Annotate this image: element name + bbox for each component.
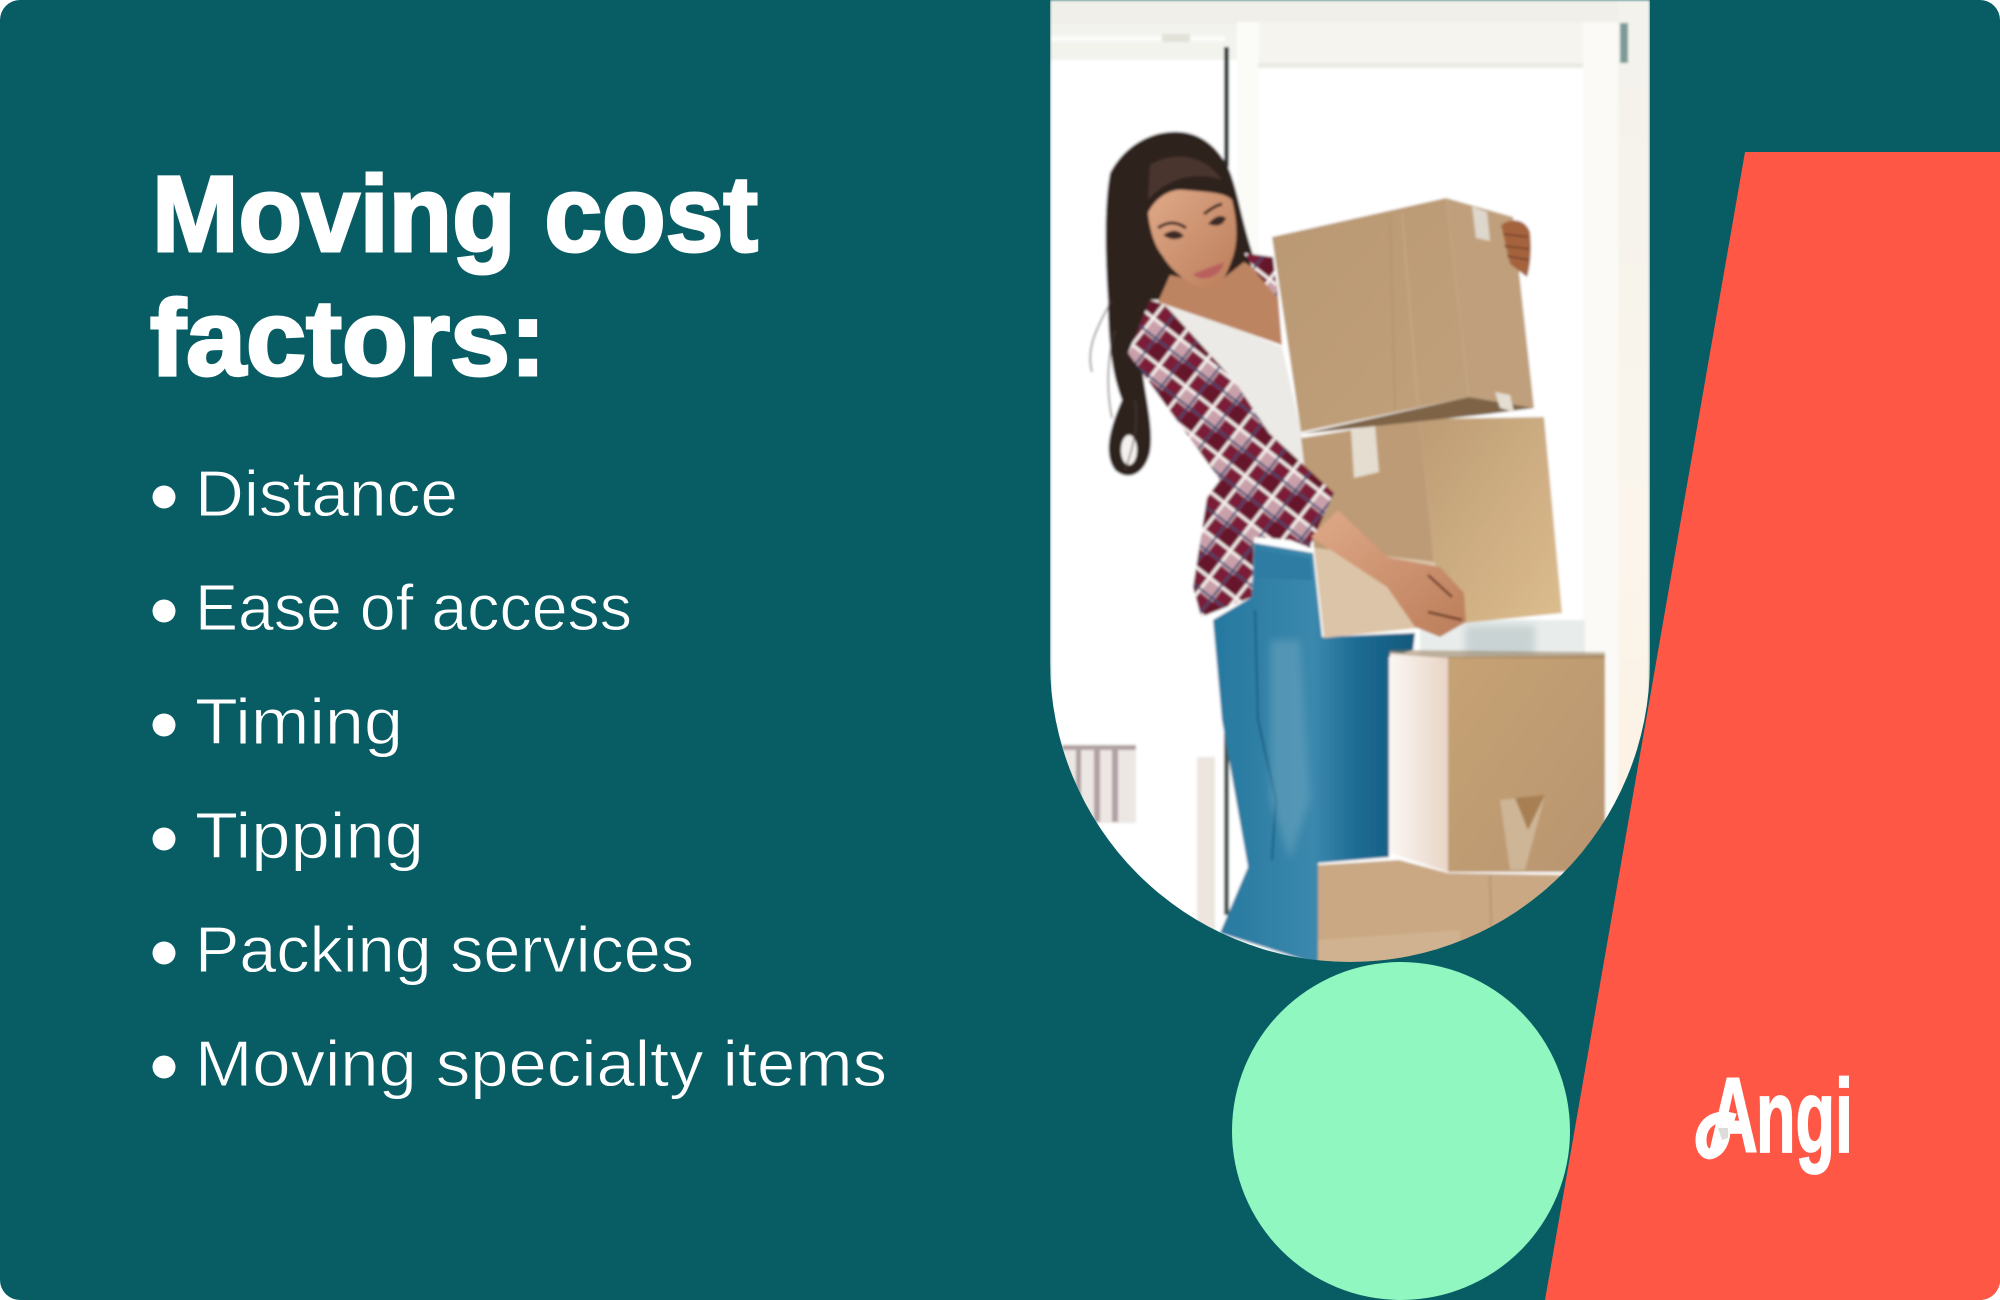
bullet list of moving cost factors	[152, 457, 887, 1100]
plaid shirt tail	[1193, 480, 1311, 617]
tape on box 1	[1472, 206, 1490, 241]
photo: woman carrying moving boxes	[1050, 0, 1650, 975]
tape on box 2	[1351, 425, 1379, 478]
item: Moving specialty items: Moving specialty items	[195, 1027, 887, 1100]
Angi logo	[1696, 1076, 1849, 1175]
box 3, middle stack	[1390, 652, 1448, 872]
item: Tipping: Tipping	[195, 799, 424, 872]
box 1, top	[1272, 198, 1469, 432]
title: factors:	[150, 277, 546, 398]
jeans	[1213, 543, 1415, 965]
item: Packing services: Packing services	[195, 913, 694, 986]
packing tape on box 3	[1500, 795, 1545, 870]
item: Distance	[152, 470, 454, 516]
box 4, bottom	[1316, 858, 1562, 942]
Angi logo: ngi	[1756, 1059, 1853, 1175]
Angi logo: A	[1708, 1055, 1758, 1175]
white t-shirt	[1166, 305, 1305, 466]
eyebrows	[1158, 204, 1222, 228]
item: Tipping	[152, 812, 419, 871]
forearm and hand	[1311, 510, 1466, 637]
eyes	[1163, 216, 1226, 239]
hair loop opening	[1121, 435, 1137, 465]
hair	[1106, 132, 1254, 476]
item: Ease of access: Ease of access	[195, 571, 632, 644]
lips	[1193, 262, 1224, 278]
decorative coral panel	[1545, 152, 2000, 1300]
face	[1148, 190, 1236, 290]
box 2	[1301, 419, 1434, 562]
photo background: window and door frames	[1050, 0, 1650, 965]
title	[150, 172, 758, 378]
hand on top box	[1501, 220, 1531, 277]
neck and chest	[1158, 262, 1282, 345]
decorative mint circle	[1232, 962, 1570, 1300]
item: Ease of access	[152, 584, 630, 630]
item: Timing: Timing	[195, 685, 403, 758]
title: Moving cost	[152, 153, 758, 274]
item: Distance: Distance	[195, 457, 458, 530]
item: Timing	[152, 698, 398, 757]
plaid collar	[1244, 253, 1278, 298]
plaid sleeve	[1128, 300, 1334, 548]
hair highlight	[1148, 157, 1222, 200]
stray hair strands	[1090, 300, 1136, 470]
